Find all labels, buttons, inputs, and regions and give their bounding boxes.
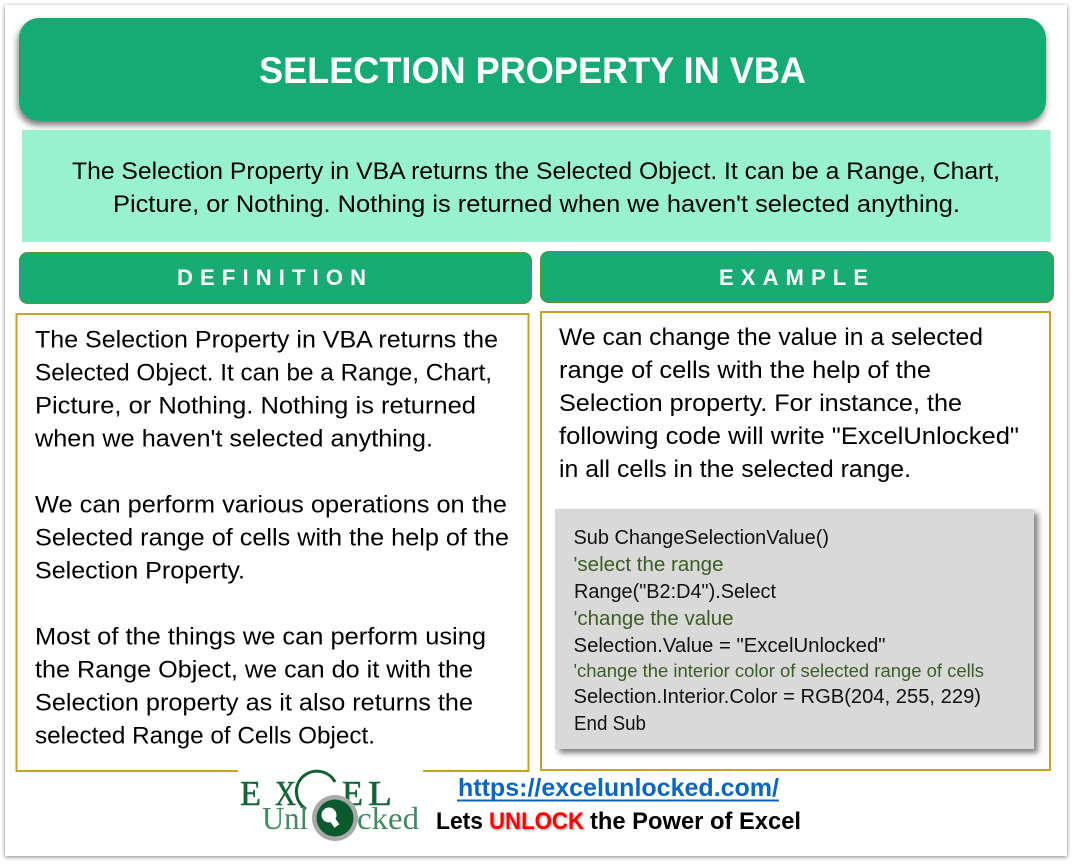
summary band: Picture, or Nothing. Nothing is returned when we haven't selected anything. [113, 191, 960, 218]
code box: Range("B2:D4").Select [574, 580, 776, 603]
code box: Selection.Interior.Color = RGB(204, 255, 229) [574, 685, 981, 708]
panel: definition: Most of the things we can perform using [35, 624, 486, 650]
heading: definition [20, 252, 532, 304]
code box: 'select the range [574, 553, 724, 576]
logo: Excel Unlocked: L [368, 774, 392, 813]
panel: example: We can change the value in a selected [559, 324, 983, 351]
tagline: UNLOCK [489, 808, 585, 835]
panel: definition [16, 314, 528, 771]
panel: definition: Selection Property. [35, 558, 245, 584]
summary band [22, 130, 1050, 242]
code box: 'change the interior color of selected range of cells [574, 661, 984, 681]
title banner: SELECTION PROPERTY IN VBA [259, 49, 806, 91]
panel: definition: the Range Object, we can do it with the [35, 656, 473, 684]
panel: definition: Selection property as it also returns the [35, 690, 473, 716]
heading: definition: DEFINITION [177, 265, 366, 290]
panel: example [541, 312, 1050, 770]
logo: Excel Unlocked: Unl [262, 800, 308, 836]
code box: Sub ChangeSelectionValue() [574, 526, 829, 549]
logo: Excel Unlocked: E [342, 774, 363, 813]
code box: Selection.Value = "ExcelUnlocked" [574, 634, 886, 657]
website link: https://excelunlocked.com/ [458, 774, 779, 802]
panel: definition: We can perform various operations on the [35, 492, 507, 518]
logo: Excel Unlocked [238, 770, 423, 841]
panel: definition: selected Range of Cells Object. [35, 722, 375, 750]
heading: example: EXAMPLE [719, 265, 868, 290]
panel: definition: The Selection Property in VBA returns the [35, 326, 498, 354]
code box [555, 509, 1034, 749]
code box: 'change the value [574, 607, 734, 630]
logo: Excel Unlocked: cked [357, 800, 419, 836]
summary band: The Selection Property in VBA returns the Selected Object. It can be a Range, Chart, [72, 158, 1000, 185]
heading: example [540, 252, 1054, 302]
panel: definition: Picture, or Nothing. Nothing is returned [35, 392, 476, 420]
panel: example: in all cells in the selected range. [559, 456, 911, 483]
tagline: Lets [436, 808, 483, 835]
panel: definition: Selected range of cells with the help of the [35, 524, 509, 552]
code box: End Sub [574, 712, 646, 735]
logo: Excel Unlocked: E [240, 774, 261, 813]
tagline [436, 808, 801, 835]
panel: example: range of cells with the help of the [559, 357, 931, 384]
title banner [19, 18, 1046, 121]
panel: definition: Selected Object. It can be a Range, Chart, [35, 360, 492, 386]
tagline: the Power of Excel [590, 808, 801, 835]
logo: Excel Unlocked: X [275, 774, 296, 813]
panel: example: Selection property. For instance, the [559, 390, 962, 417]
panel: definition: when we haven't selected anything. [34, 426, 433, 452]
panel: example: following code will write "ExcelUnlocked" [559, 423, 1019, 450]
